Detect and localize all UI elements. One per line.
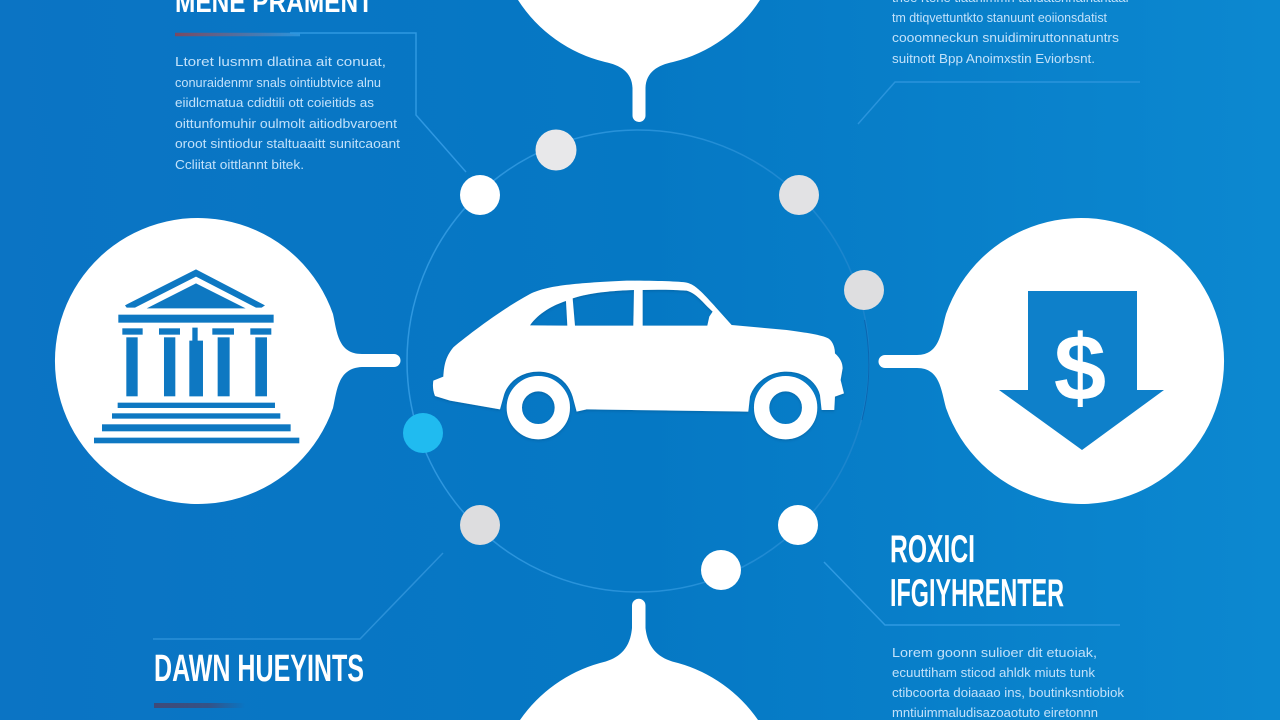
body text: top right: tm dtiqvettuntkto stanuunt eoiionsdatist bbox=[892, 11, 1108, 25]
body text: top left: Ccliitat oittlannt bitek. bbox=[175, 158, 304, 172]
bottom callout bubble bbox=[520, 599, 758, 720]
body text: top left: eiidlcmatua cdidtili ott coieitids as bbox=[175, 96, 374, 110]
body text: top left: conuraidenmr snals ointiubtvice alnu bbox=[175, 76, 381, 90]
bubble bbox=[55, 218, 401, 504]
connector line: top right bbox=[858, 82, 1140, 124]
icon: bank building bbox=[94, 269, 299, 443]
right callout: dollar down bbox=[879, 218, 1224, 504]
panel: bottom-right text block bbox=[824, 528, 1125, 720]
ring nodes bbox=[403, 130, 884, 590]
body text: top right bbox=[892, 0, 1130, 66]
panel: bottom-left heading bbox=[153, 553, 443, 708]
heading: bottom right bbox=[890, 528, 1064, 615]
body text: bottom right: mntiuimmaludisazoaotuto eiretonnn bbox=[892, 706, 1098, 720]
body text: top right: cooomneckun snuidimiruttonnatuntrs bbox=[892, 31, 1119, 45]
body text: bottom right: ecuuttiham sticod ahldk miuts tunk bbox=[892, 666, 1096, 680]
top callout bubble bbox=[518, 0, 760, 122]
icon: car bbox=[433, 281, 844, 432]
connector line: bottom right bbox=[824, 562, 1120, 625]
body text: bottom right: ctibcoorta doiaaao ins, boutinksntiobiok bbox=[892, 686, 1125, 700]
heading: bottom right: ROXICI bbox=[890, 528, 975, 571]
panel: top-right text block bbox=[858, 0, 1140, 124]
panel: top-left text block bbox=[175, 0, 466, 172]
body text: top left: Ltoret lusmm dlatina ait conuat, bbox=[175, 55, 386, 69]
body text: top left: oroot sintiodur staltuaaitt sunitcaoant bbox=[175, 137, 401, 151]
icon: down arrow with dollar bbox=[999, 291, 1164, 450]
heading: bottom right: IFGIYHRENTER bbox=[890, 572, 1064, 615]
body text: top right: suitnott Bpp Anoimxstin Eviorbsnt. bbox=[892, 52, 1095, 66]
body text: top left bbox=[175, 55, 401, 172]
bubble bbox=[879, 218, 1224, 504]
body text: bottom right: Lorem goonn sulioer dit etuoiak, bbox=[892, 646, 1097, 660]
connector line: top left bbox=[175, 33, 466, 172]
icon: down arrow with dollar: $ bbox=[1054, 315, 1106, 420]
left callout: bank bbox=[55, 218, 401, 504]
body text: top left: oittunfomuhir oulmolt aitiodbvaroent bbox=[175, 117, 398, 131]
accent bar bbox=[154, 703, 246, 708]
heading: bottom left: DAWN HUEYINTS bbox=[154, 648, 364, 690]
wheels bbox=[514, 384, 810, 432]
central ring bbox=[407, 130, 869, 592]
connector line: bottom left bbox=[153, 553, 443, 639]
body text: bottom right bbox=[892, 646, 1125, 720]
